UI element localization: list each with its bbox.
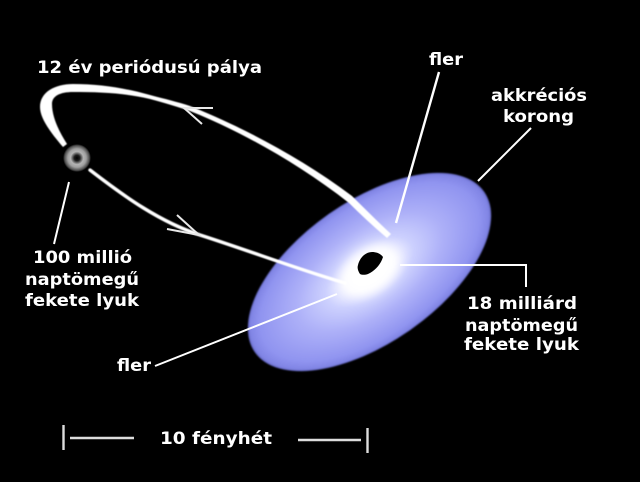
label: upper flare: fler [429,50,464,70]
label: large black hole mass: 18 milliárd [467,294,577,314]
label: large black hole mass: naptömegű [465,316,578,336]
label: scale distance: 10 fényhét [160,429,272,449]
label: large black hole mass [464,294,580,355]
title: orbit period: 12 év periódusú pálya [37,58,262,78]
label: accretion disk: korong [503,107,574,127]
label: accretion disk: akkréciós [491,86,587,106]
orbit: return thin arc [90,170,345,283]
icon: 100 million solar mass black hole [63,144,91,172]
label: small black hole mass [25,248,140,311]
label: accretion disk [491,86,587,127]
leader line: accretion disk [478,128,531,181]
label: lower flare: fler [117,356,152,376]
arrow: lower orbit direction [167,215,199,235]
arrow: upper orbit direction [184,108,213,124]
leader line: small black hole [54,182,69,244]
leader line: lower flare [155,294,337,366]
label: small black hole mass: fekete lyuk [25,291,140,311]
leader line: large black hole [400,265,526,287]
accretion disk [214,134,525,410]
leader line: upper flare [396,72,439,223]
bright flare glow [333,236,407,304]
label: small black hole mass: 100 millió [33,248,132,268]
label: small black hole mass: naptömegű [25,270,139,290]
icon: 18 billion solar mass black hole [358,252,383,275]
orbit: outgoing thick arc [40,84,391,238]
label: large black hole mass: fekete lyuk [464,335,580,355]
